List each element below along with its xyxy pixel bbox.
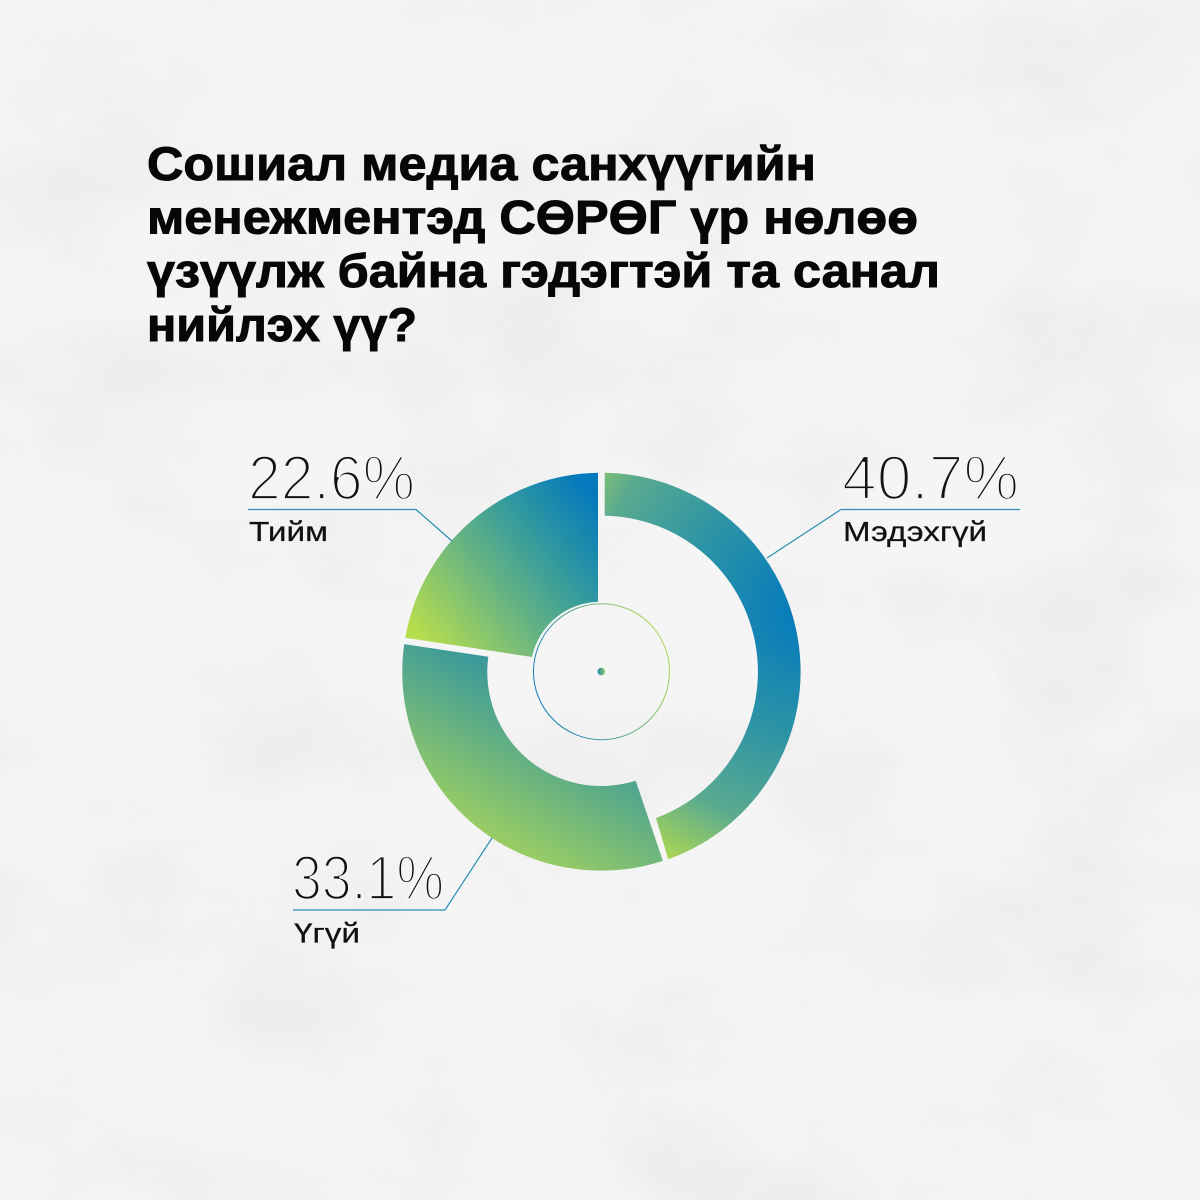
callout: Үгүй 33.1%: Үгүй (294, 918, 360, 948)
center dot (598, 668, 605, 675)
leader line: Үгүй (293, 838, 492, 910)
title: Сошиал медиа санхүүгийн (147, 138, 816, 191)
leader line: Мэдэхгүй (767, 510, 1020, 558)
center ring (534, 604, 670, 740)
title (147, 138, 940, 352)
callout: Тийм 22.6%: 22.6% (248, 444, 415, 514)
callout: Мэдэхгүй 40.7%: 40.7% (842, 444, 1019, 514)
leader line: Тийм (248, 510, 452, 541)
title: үзүүлж байна гэдэгтэй та санал (147, 245, 940, 298)
callout: Тийм 22.6%: Тийм (249, 516, 328, 547)
title: менежментэд СӨРӨГ үр нөлөө (147, 192, 918, 244)
callout: Үгүй 33.1% (292, 838, 492, 948)
callout: Мэдэхгүй 40.7%: Мэдэхгүй (843, 516, 987, 547)
callout: Мэдэхгүй 40.7% (767, 444, 1020, 558)
callout: Үгүй 33.1%: 33.1% (292, 844, 444, 914)
donut chart (402, 473, 801, 871)
title: нийлэх үү? (147, 299, 417, 352)
callout: Тийм 22.6% (248, 444, 452, 547)
segment: Тийм 22.6% (405, 473, 598, 657)
segment: Мэдэхгүй 40.7% (605, 473, 801, 859)
segment: Үгүй 33.1% (402, 644, 663, 871)
